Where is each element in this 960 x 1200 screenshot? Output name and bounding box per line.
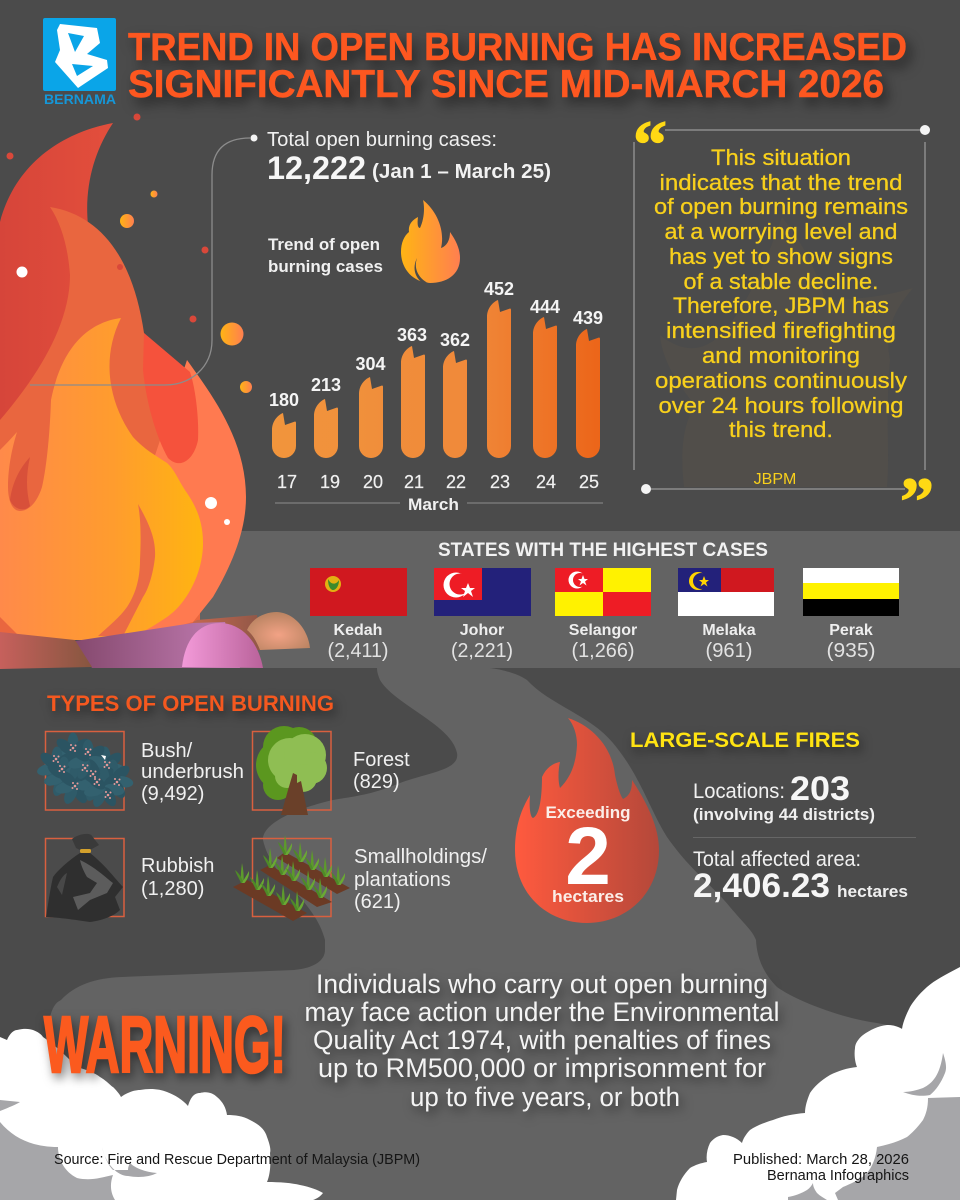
bar chart: daily cases: 363 — [397, 325, 427, 345]
inner coral wisp — [98, 504, 155, 636]
panel: big fire illustration — [0, 123, 310, 669]
red tongue — [143, 333, 198, 463]
faint flame behind quote — [660, 217, 913, 487]
state labels: (935) — [826, 640, 876, 662]
state labels: (961) — [706, 640, 752, 662]
state labels: Kedah — [334, 622, 382, 639]
smoke cloud: bottom right — [676, 967, 960, 1200]
locations stat: (involving 44 districts) — [693, 805, 875, 824]
total open burning cases: 12,222 — [267, 150, 366, 186]
state labels: Johor — [460, 622, 504, 639]
publication credit — [733, 1151, 909, 1184]
quote text: at a worrying level and — [664, 219, 898, 244]
large-scale heading: LARGE-SCALE FIRES — [630, 729, 860, 752]
quote attribution: JBPM — [754, 471, 796, 488]
type labels: Rubbish — [141, 855, 214, 877]
warning text: Individuals who carry out open burning — [316, 969, 768, 999]
quote text: indicates that the trend — [660, 170, 902, 195]
bar chart: daily cases: 20 — [363, 472, 383, 492]
chart subtitle: burning cases — [268, 258, 383, 276]
flag: Kedah — [310, 568, 407, 616]
title — [128, 26, 907, 106]
quote text: has yet to show signs — [669, 244, 893, 269]
states heading: STATES WITH THE HIGHEST CASES — [438, 540, 768, 561]
bar chart: daily cases: 23 — [490, 472, 510, 492]
type labels: (1,280) — [141, 878, 204, 900]
quote frame — [634, 130, 925, 489]
flag: Melaka — [678, 568, 774, 616]
publication credit: Bernama Infographics — [767, 1167, 909, 1184]
left log — [0, 632, 92, 669]
quote text: operations continuously — [655, 368, 908, 393]
connector line from fire to total — [30, 134, 258, 385]
locations stat: 203 — [790, 770, 850, 808]
outer red flame — [0, 123, 130, 640]
bar chart: daily cases: 213 — [311, 375, 341, 395]
warning text: may face action under the Environmental — [304, 997, 780, 1027]
state labels: Perak — [829, 622, 873, 639]
flame badge — [515, 718, 659, 923]
publication credit: Published: March 28, 2026 — [733, 1151, 909, 1168]
warning text — [304, 969, 780, 1112]
flag: Selangor — [555, 568, 651, 616]
chart subtitle: Trend of open — [268, 236, 380, 254]
type labels: Forest — [353, 749, 410, 771]
warning text: up to RM500,000 or imprisonment for — [318, 1053, 766, 1083]
locations stat: Locations: — [693, 780, 785, 803]
state labels: (1,266) — [572, 640, 634, 662]
bar chart: daily cases: 19 — [320, 472, 340, 492]
orange yellow inner flame — [0, 318, 203, 640]
opening quotation mark: “ — [633, 106, 667, 182]
state labels: (2,411) — [328, 640, 388, 662]
state labels: Selangor — [569, 622, 637, 639]
panel: large-scale fires — [515, 718, 916, 923]
type labels: (9,492) — [141, 783, 204, 805]
title: SIGNIFICANTLY SINCE MID-MARCH 2026 — [128, 63, 884, 106]
quote text — [654, 145, 908, 442]
chart subtitle — [268, 236, 383, 276]
bar chart: daily cases: 22 — [446, 472, 466, 492]
affected area stat: Total affected area: — [693, 848, 861, 871]
panel: states with the highest cases — [310, 540, 899, 662]
purple log — [75, 622, 240, 668]
flame badge: 2 — [565, 811, 611, 902]
bar chart: daily cases: 439 — [573, 308, 603, 328]
embers and sparks — [6, 114, 252, 525]
icon: small flame — [401, 200, 460, 283]
locations stat — [693, 770, 875, 824]
type labels — [141, 740, 487, 913]
state labels — [328, 622, 876, 662]
pink log end — [182, 623, 263, 668]
bar chart: daily cases: 17 — [277, 472, 297, 492]
type labels: Bush/ — [141, 740, 193, 762]
icon frames — [46, 732, 331, 916]
source: Source: Fire and Rescue Department of Malaysia (JBPM) — [54, 1151, 420, 1168]
quote text: and monitoring — [702, 343, 860, 368]
affected area stat: hectares — [837, 882, 908, 901]
state labels: Melaka — [702, 622, 756, 639]
quote text: This situation — [711, 145, 851, 170]
bar chart: daily cases: 25 — [579, 472, 599, 492]
affected area stat — [693, 848, 908, 905]
type labels: (829) — [353, 771, 400, 793]
quote text: this trend. — [729, 417, 833, 442]
bar chart: daily cases: 362 — [440, 330, 470, 350]
flag: Johor — [434, 568, 531, 616]
types heading: TYPES OF OPEN BURNING — [47, 691, 334, 716]
warning text: up to five years, or both — [410, 1082, 680, 1112]
flag: Perak — [803, 568, 899, 616]
logo: Bernama — [43, 18, 116, 107]
panel: JBPM quote — [633, 106, 934, 539]
quote text: Therefore, JBPM has — [673, 293, 889, 318]
bar chart: daily cases: 180 — [269, 390, 299, 410]
bar chart: daily cases — [269, 279, 603, 514]
type labels: Smallholdings/ — [354, 846, 487, 868]
logo: Bernama: BERNAMA — [44, 92, 116, 107]
warning text: Quality Act 1974, with penalties of fines — [313, 1025, 771, 1055]
total open burning cases: Total open burning cases: — [267, 129, 497, 151]
flame badge: Exceeding — [546, 803, 630, 822]
quote text: over 24 hours following — [658, 393, 904, 418]
icon: bush — [36, 732, 134, 809]
total open burning cases: (Jan 1 – March 25) — [372, 161, 551, 183]
bar chart: daily cases: 21 — [404, 472, 424, 492]
bar chart: daily cases: 452 — [484, 279, 514, 299]
bar chart: daily cases: 444 — [530, 297, 560, 317]
quote text: of open burning remains — [654, 194, 908, 219]
icon: rubbish bag — [46, 834, 123, 922]
bar chart: daily cases: 304 — [355, 354, 386, 374]
quote text: intensified firefighting — [666, 318, 896, 343]
closing quotation mark: ” — [900, 463, 934, 539]
back log — [193, 615, 262, 650]
bar chart: daily cases: March — [408, 496, 459, 514]
quote text: of a stable decline. — [684, 269, 878, 294]
state labels: (2,221) — [451, 640, 513, 662]
type labels: plantations — [354, 869, 451, 891]
middle orange flame — [0, 207, 200, 640]
icon: tree — [256, 726, 327, 815]
bar chart: daily cases: 24 — [536, 472, 556, 492]
flame badge: hectares — [552, 887, 624, 906]
panel: types of open burning — [36, 691, 487, 922]
title: TREND IN OPEN BURNING HAS INCREASED — [128, 26, 907, 69]
type labels: underbrush — [141, 761, 244, 783]
coral outer flame — [120, 360, 246, 642]
affected area stat: 2,406.23 — [693, 867, 830, 905]
icon: plantation — [233, 835, 350, 921]
smoke cloud: bottom left — [0, 1029, 323, 1200]
total open burning cases — [267, 129, 551, 186]
warning heading: WARNING! — [44, 1000, 286, 1089]
tan log end — [247, 612, 310, 650]
smoke stream background — [0, 531, 960, 1200]
inner red wisp — [10, 457, 30, 509]
type labels: (621) — [354, 891, 401, 913]
